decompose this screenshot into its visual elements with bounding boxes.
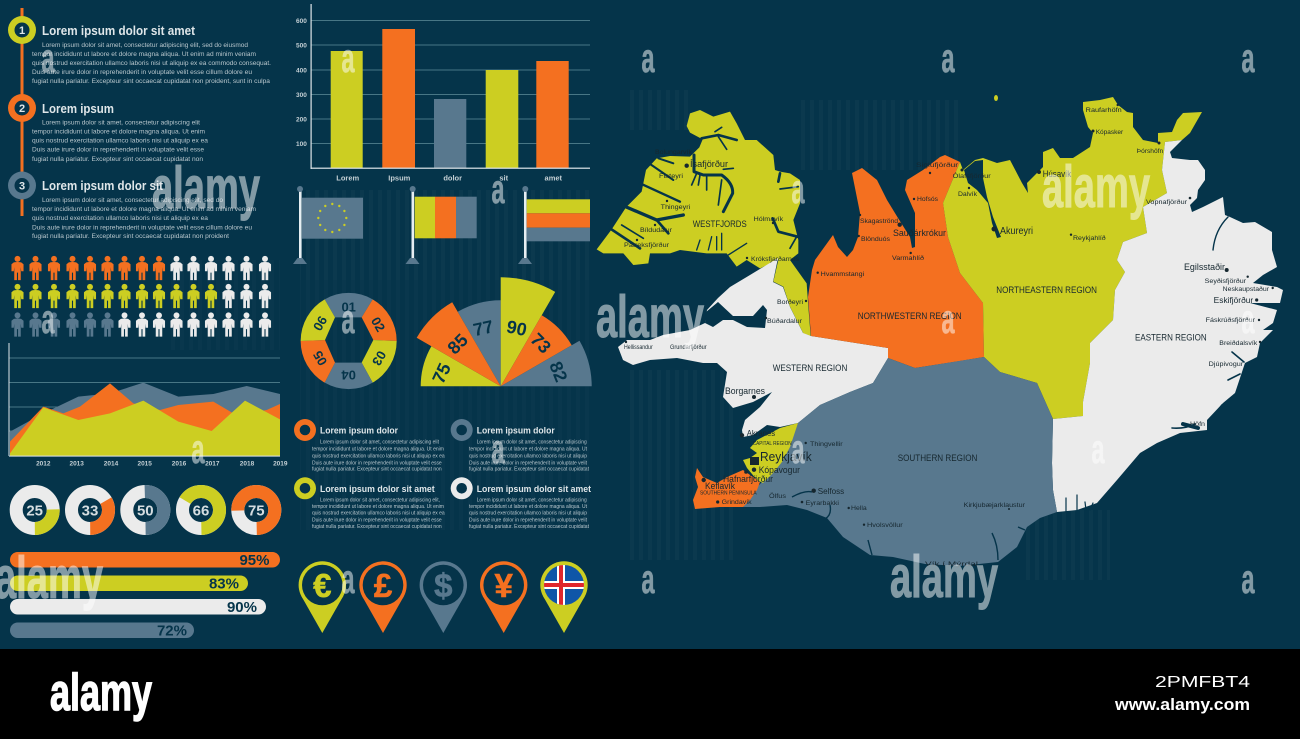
pin: dollar xyxy=(420,561,467,633)
area chart: 2019 xyxy=(273,460,288,468)
city and region labels: Vík í Mýrdal xyxy=(925,561,979,568)
info block: white: fugiat nulla pariatur. Excepteur sint occaecat cupidatat xyxy=(469,524,589,530)
city and region labels: Grundarfjörður xyxy=(670,344,707,351)
eastern fjords xyxy=(1066,217,1244,512)
watermarks: a xyxy=(42,35,55,81)
city and region labels: Ólafsfjörður xyxy=(953,171,991,180)
pin: yen: ¥ xyxy=(495,567,514,604)
item 2 body: Lorem ipsum dolor sit amet, consectetur adipiscing elit xyxy=(42,120,200,126)
donut 25: 25 xyxy=(26,502,43,520)
region: Western xyxy=(618,258,888,437)
info block: white: Duis aute irure dolor in reprehenderit in voluptate velit xyxy=(469,517,587,523)
bar chart: dolor xyxy=(443,174,462,182)
info block: white xyxy=(451,477,592,530)
city and region labels: EASTERN REGION xyxy=(1135,332,1207,342)
watermarks: a xyxy=(492,426,505,472)
bar chart: 500 xyxy=(296,42,307,50)
area chart: 2012 xyxy=(36,460,51,468)
item 3 body xyxy=(32,197,257,240)
city and region labels: Neskaupstaður xyxy=(1223,285,1270,293)
region: Westfjords xyxy=(597,110,820,336)
info block: orange: Lorem ipsum dolor xyxy=(320,426,398,436)
city and region labels: Hella xyxy=(851,505,867,512)
polar wedge chart: 77 xyxy=(471,316,495,340)
bar 72%: 72% xyxy=(157,622,187,640)
city and region labels: Eyrarbakki xyxy=(806,500,840,507)
segmented ring chart: 06 xyxy=(310,313,330,333)
info block: white: quis nostrud exercitation ullamco laboris nisi ut aliquip xyxy=(469,511,587,517)
region: Capital xyxy=(743,423,798,483)
bar chart: Lorem xyxy=(336,174,359,182)
info block: orange: tempor incididunt ut labore et dolore magna aliqua. Ut enim xyxy=(312,446,445,452)
bar chart: 100 xyxy=(296,141,307,148)
footer logo: alamy xyxy=(50,664,152,722)
city and region labels: Kirkjubæjarklaustur xyxy=(964,502,1026,509)
info block: orange: Duis aute irure dolor in reprehenderit in voluptate velit esse xyxy=(312,460,442,466)
flag: vertical tricolour xyxy=(406,186,477,264)
city and region labels: Djúpivogur xyxy=(1209,361,1244,368)
segmented ring chart: 03 xyxy=(369,348,389,368)
item 1 badge: 1 xyxy=(19,25,25,37)
watermarks: a xyxy=(342,35,355,81)
area chart: 2016 xyxy=(172,460,187,468)
city and region labels: Sauðárkrókur xyxy=(893,228,946,238)
item 1 heading: Lorem ipsum dolor sit amet xyxy=(42,24,196,38)
item 2 body: Duis aute irure dolor in reprehenderit in voluptate velit esse xyxy=(32,146,204,154)
info block: yellow xyxy=(294,477,445,530)
city and region labels: Vopnafjörður xyxy=(1146,198,1188,206)
item 1 body: tempor incididunt ut labore et dolore magna aliqua. Ut enim ad minim veniam xyxy=(32,51,257,58)
watermarks: a xyxy=(642,35,655,81)
island: Grimsey xyxy=(994,95,998,101)
segmented ring chart: 05 xyxy=(310,348,330,368)
watermarks: alamy xyxy=(596,284,704,350)
bar 90%: 90% xyxy=(227,599,257,616)
watermarks: a xyxy=(342,296,355,342)
watermarks: a xyxy=(1242,556,1255,602)
bar 83%: 83% xyxy=(209,576,239,592)
segmented ring chart: 01 xyxy=(341,300,356,315)
watermarks: a xyxy=(192,426,205,472)
info block: yellow: Lorem ipsum dolor sit amet xyxy=(320,484,435,495)
pin: dollar: $ xyxy=(434,567,452,604)
city and region labels: Blönduós xyxy=(861,236,891,243)
donut 50: 50 xyxy=(137,502,154,520)
city and region labels: CAPITAL REGION xyxy=(753,441,792,447)
bar 95% xyxy=(10,552,280,569)
item 2 body xyxy=(32,120,208,163)
city and region labels: Varmahlíð xyxy=(892,254,924,262)
city and region labels: Hafnarfjörður xyxy=(723,474,773,485)
item 1 body: Duis aute irure dolor in reprehenderit in voluptate velit esse cillum dolore eu xyxy=(32,69,252,76)
donut 66 xyxy=(175,484,227,536)
segmented ring chart xyxy=(301,293,397,389)
bar chart xyxy=(296,4,590,182)
bar 83% xyxy=(10,576,248,592)
city and region labels: NORTHWESTERN REGION xyxy=(858,311,962,321)
info block: white: Lorem ipsum dolor sit amet xyxy=(477,484,592,495)
bar chart: 300 xyxy=(296,92,307,99)
region: Northeastern xyxy=(943,97,1202,419)
city and region labels: Patreksfjörður xyxy=(624,241,670,249)
region: Southern Peninsula xyxy=(693,468,760,509)
polar wedge chart: 75 xyxy=(428,360,455,387)
city and region labels: Selfoss xyxy=(818,486,844,496)
donut 75 xyxy=(238,492,275,528)
watermarks: alamy xyxy=(0,545,103,611)
city and region labels: Húsavík xyxy=(1043,169,1072,179)
area chart: 2014 xyxy=(104,460,119,468)
city and region labels: Kópavogur xyxy=(759,465,800,476)
info block: steel: fugiat nulla pariatur. Excepteur sint occaecat cupidatat xyxy=(469,467,589,473)
Eyjafjordur xyxy=(964,160,1001,238)
item 2 body: tempor incididunt ut labore et dolore magna aliqua. Ut enim xyxy=(32,128,205,136)
item 1 body: Lorem ipsum dolor sit amet, consectetur adipiscing elit, sed do eiusmod xyxy=(42,42,248,49)
pin: yen xyxy=(480,561,527,633)
bar 95%: 95% xyxy=(239,552,270,569)
city and region labels: Breiðdalsvík xyxy=(1219,339,1258,347)
polar wedge chart: 82 xyxy=(545,359,571,385)
footer url: www.alamy.com xyxy=(1114,695,1250,714)
city and region labels: Hvammstangi xyxy=(821,271,865,278)
city and region labels: Siglufjörður xyxy=(916,161,959,169)
watermarks: a xyxy=(792,166,805,212)
city and region labels: Borðeyri xyxy=(777,298,803,306)
city dots xyxy=(625,104,1274,526)
item 3 body: tempor incididunt ut labore et dolore magna aliqua. Ut enim ad minim veniam xyxy=(32,206,257,213)
city and region labels: NORTHEASTERN REGION xyxy=(996,285,1097,295)
item 2 badge: 2 xyxy=(19,103,25,115)
city and region labels: Bolungarvík xyxy=(655,149,693,156)
region: Eastern xyxy=(1052,140,1283,512)
watermarks: a xyxy=(342,556,355,602)
info block: yellow: Duis aute irure dolor in reprehenderit in voluptate velit esse xyxy=(312,517,442,523)
city and region labels: Eskifjörður xyxy=(1214,296,1254,305)
city and region labels: Skagaströnd xyxy=(860,218,898,225)
city and region labels: Seyðisfjörður xyxy=(1205,277,1247,285)
city and region labels: WESTFJORDS xyxy=(693,219,747,229)
area chart: 2018 xyxy=(240,460,255,468)
item 3 badge: 3 xyxy=(19,180,25,192)
city and region labels: Akranes xyxy=(747,429,775,438)
area chart: 2015 xyxy=(137,460,152,468)
city and region labels: Reykjahlíð xyxy=(1073,234,1106,242)
watermarks: a xyxy=(492,166,505,212)
city and region labels: Raufarhöfn xyxy=(1086,107,1122,114)
region: Southern xyxy=(743,357,1057,566)
city and region labels: Reykjavík xyxy=(760,449,812,464)
city and region labels: Dalvík xyxy=(958,191,978,198)
info block: yellow: Lorem ipsum dolor sit amet, consectetur adipiscing elit, xyxy=(320,498,440,504)
polar wedge chart xyxy=(417,277,592,387)
info block: white: Lorem ipsum dolor sit amet, consectetur adipiscing xyxy=(477,498,587,504)
info block: orange: fugiat nulla pariatur. Excepteur sint occaecat cupidatat non xyxy=(312,467,442,473)
info block: orange xyxy=(294,419,445,473)
item 3 body: Lorem ipsum dolor sit amet, consectetur adipiscing elit, sed do xyxy=(42,197,223,204)
city and region labels: Bíldudalur xyxy=(640,227,673,234)
city and region labels: Búðardalur xyxy=(767,317,803,325)
info block: orange: Lorem ipsum dolor sit amet, consectetur adipiscing elit xyxy=(320,440,439,446)
watermarks xyxy=(0,35,1255,611)
bar 72% xyxy=(10,622,194,640)
item 3 body: fugiat nulla pariatur. Excepteur sint occaecat cupidatat non proident xyxy=(32,233,229,240)
city and region labels: WESTERN REGION xyxy=(773,363,847,373)
segmented ring chart: 04 xyxy=(341,367,356,382)
city and region labels: Hellissandur xyxy=(624,345,653,351)
city and region labels: Hvolsvöllur xyxy=(867,522,903,529)
info block: white: tempor incididunt ut labore et dolore magna aliqua. Ut xyxy=(469,504,587,510)
area chart: 2017 xyxy=(205,460,220,468)
donut 33: 33 xyxy=(82,502,98,520)
item 3 body: quis nostrud exercitation ullamco laboris nisi ut aliquip ex ea xyxy=(32,215,208,222)
bar chart: 200 xyxy=(296,116,307,124)
item 2 body: fugiat nulla pariatur. Excepteur sint occaecat cupidatat non xyxy=(32,156,203,163)
city and region labels: Borgarnes xyxy=(725,386,765,396)
bar chart: sit xyxy=(499,174,509,182)
city and region labels: Egilsstaðir xyxy=(1184,262,1225,273)
bar chart: Ipsum xyxy=(388,174,411,182)
watermarks: alamy xyxy=(890,544,998,610)
donut 33 xyxy=(65,485,115,535)
info block: steel: Lorem ipsum dolor sit amet, consectetur adipiscing xyxy=(477,440,587,446)
info block: yellow: fugiat nulla pariatur. Excepteur sint occaecat cupidatat non xyxy=(312,524,442,530)
item 1 body: quis nostrud exercitation ullamco laboris nisi ut aliquip ex ea commodo consequat. xyxy=(32,60,271,67)
watermarks: a xyxy=(1092,426,1105,472)
info block: orange: quis nostrud exercitation ullamco laboris nisi ut aliquip ex ea xyxy=(312,453,445,459)
city and region labels: Hofsós xyxy=(917,196,939,203)
map of Iceland xyxy=(597,95,1283,568)
footer image id: 2PMFBT4 xyxy=(1155,674,1250,691)
city and region labels: Króksfjarðarnes xyxy=(751,255,800,263)
donut 75: 75 xyxy=(248,502,265,520)
city and region labels: SOUTHERN REGION xyxy=(898,453,977,463)
item 2 badge xyxy=(8,94,36,122)
city and region labels: Ölfus xyxy=(769,492,787,500)
city and region labels: Höfn xyxy=(1190,421,1205,428)
flag: horizontal tricolour xyxy=(518,186,590,264)
city and region labels: Grindavík xyxy=(722,499,752,506)
pin: Iceland flag xyxy=(540,561,588,633)
item 2 heading: Lorem ipsum xyxy=(42,102,114,116)
pin: euro: € xyxy=(313,567,331,604)
item 1 body xyxy=(32,42,271,85)
info block: yellow: tempor incididunt ut labore et dolore magna aliqua. Ut enim xyxy=(312,504,445,510)
city and region labels: Þórshöfn xyxy=(1137,148,1163,155)
Breidafjordur bay xyxy=(705,302,767,328)
item 1 badge xyxy=(8,16,36,44)
flag: EU on pole xyxy=(293,186,363,264)
info block: steel: quis nostrud exercitation ullamco laboris nisi ut aliquip xyxy=(469,453,587,459)
watermarks: a xyxy=(792,426,805,472)
city and region labels: Fáskrúðsfjörður xyxy=(1206,316,1256,324)
donut charts row xyxy=(16,484,275,536)
bar chart: amet xyxy=(545,174,563,182)
city and region labels: Hólmavík xyxy=(754,216,784,223)
item 3 heading: Lorem ipsum dolor sit xyxy=(42,179,164,193)
item 3 badge xyxy=(8,172,36,200)
info block: yellow: quis nostrud exercitation ullamco laboris nisi ut aliquip ex ea xyxy=(312,511,445,517)
watermarks: a xyxy=(1242,296,1255,342)
info block: steel: tempor incididunt ut labore et dolore magna aliqua. Ut xyxy=(469,446,587,452)
watermarks: a xyxy=(42,296,55,342)
pin: pound xyxy=(359,561,407,633)
bar chart: 400 xyxy=(296,68,307,74)
watermarks: a xyxy=(1242,35,1255,81)
footer band xyxy=(0,649,1300,739)
info block: steel: Lorem ipsum dolor xyxy=(477,426,555,436)
region: Northwestern xyxy=(808,155,984,368)
donut 50 xyxy=(127,492,164,528)
watermarks: alamy xyxy=(1042,154,1150,220)
city and region labels xyxy=(624,107,1270,568)
progress bars xyxy=(10,552,280,640)
city and region labels: SOUTHERN PENINSULA xyxy=(700,490,757,496)
watermarks: a xyxy=(642,556,655,602)
city and region labels: Ísafjörður xyxy=(690,159,728,169)
pin: pound: £ xyxy=(374,567,393,604)
item 3 body: Duis aute irure dolor in reprehenderit in voluptate velit esse cillum dolore eu xyxy=(32,224,252,232)
item 1 body: fugiat nulla pariatur. Excepteur sint occaecat cupidatat non proident, sunt in culpa xyxy=(32,78,270,85)
city and region labels: Kópasker xyxy=(1096,129,1124,136)
watermarks: a xyxy=(942,296,955,342)
city and region labels: Akureyri xyxy=(1000,226,1033,237)
city and region labels: Flateyri xyxy=(659,173,684,180)
pin: euro xyxy=(299,561,346,633)
bar 90% xyxy=(10,599,266,616)
polar wedge chart: 90 xyxy=(505,316,529,340)
info block: steel: Duis aute irure dolor in reprehenderit in voluptate velit xyxy=(469,460,587,466)
area chart xyxy=(8,343,288,468)
panel: numbered text list xyxy=(8,8,271,240)
item 2 body: quis nostrud exercitation ullamco laboris nisi ut aliquip ex ea xyxy=(32,138,208,144)
city and region labels: Keflavík xyxy=(705,481,735,491)
area chart: 2013 xyxy=(69,460,84,468)
polar wedge chart: 73 xyxy=(527,329,555,357)
bar chart: 600 xyxy=(296,18,307,25)
pictogram: people rows xyxy=(11,256,271,337)
segmented ring chart: 02 xyxy=(368,314,388,334)
city and region labels: Thingvellir xyxy=(810,441,843,448)
city and region labels: Thingeyri xyxy=(661,204,691,211)
donut 25 xyxy=(16,492,53,528)
watermarks: a xyxy=(942,35,955,81)
polar wedge chart: 85 xyxy=(444,330,472,358)
donut 66: 66 xyxy=(193,502,209,520)
watermarks: alamy xyxy=(152,155,260,221)
info block: steel xyxy=(451,419,589,473)
